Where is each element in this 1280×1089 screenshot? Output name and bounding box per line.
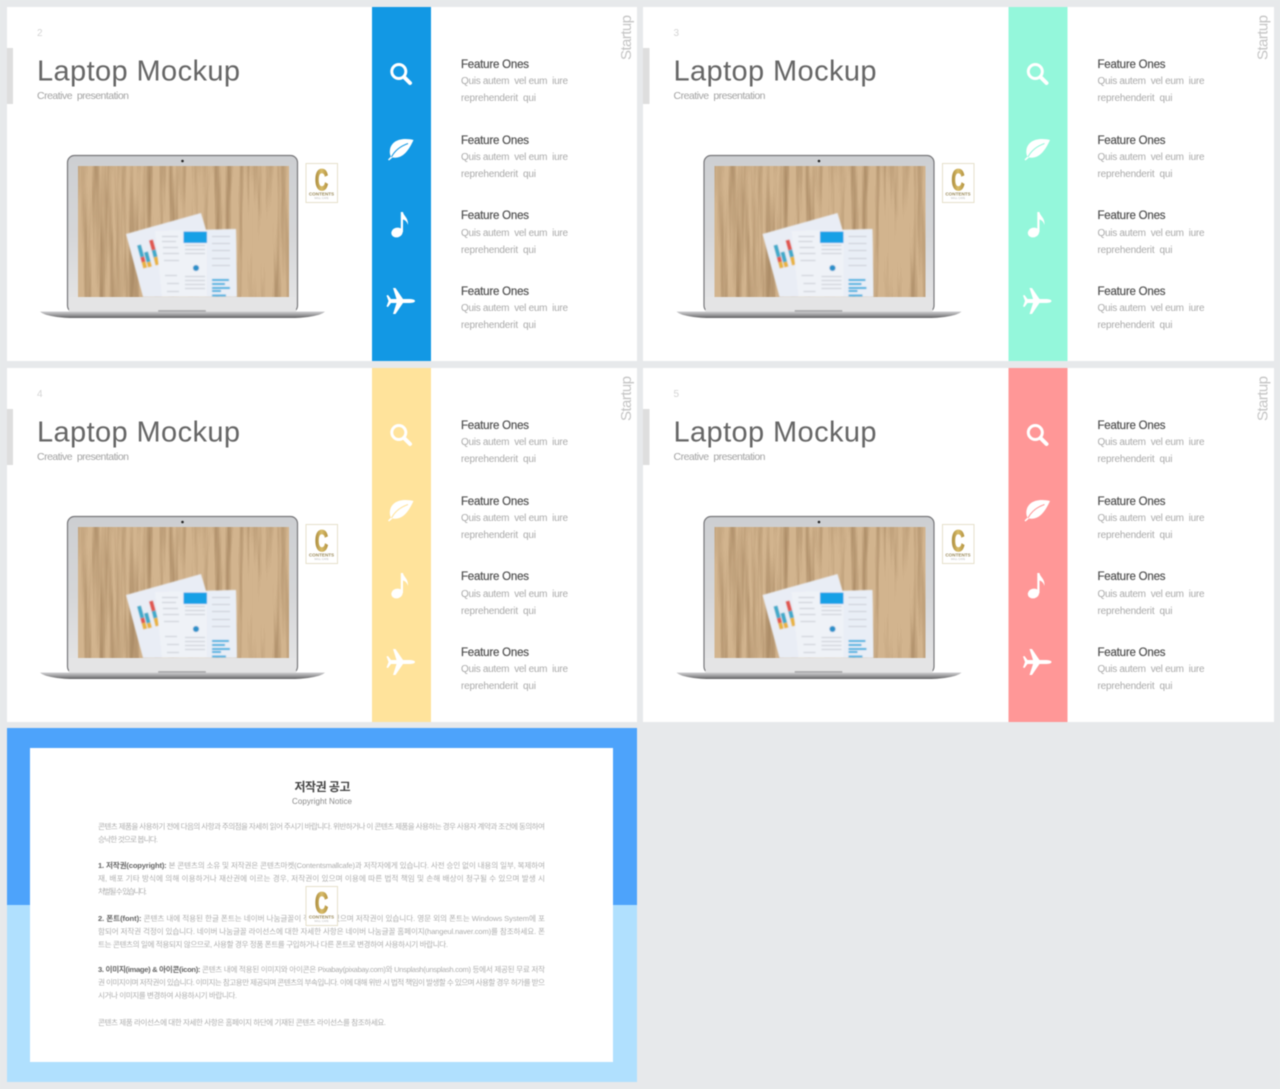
feature 3: reprehenderit qui	[461, 606, 536, 617]
feature 4	[461, 647, 568, 692]
feature 3: Feature Ones	[1098, 571, 1166, 583]
feature 2	[461, 496, 568, 541]
laptop mockup	[40, 516, 325, 679]
feature 4: Quis autem vel eum iure	[1098, 664, 1205, 675]
icon: music note	[390, 212, 408, 239]
copyright heading: 저작권 공고	[294, 779, 350, 794]
feature 1	[461, 59, 568, 104]
feature 4: Feature Ones	[1098, 647, 1166, 659]
feature 3: Feature Ones	[461, 571, 529, 583]
logo watermark: MALL CAFE	[314, 919, 329, 923]
section 2: font: 2. 폰트(font): 콘텐츠 내에 적용된 한글 폰트는 네이버 나눔글꼴이 적용되어 있으며 저작권이 있습니다. 영문 외의 폰트는 Windows System에 포	[98, 913, 545, 923]
feature 1	[461, 420, 568, 465]
icon: search	[1028, 426, 1046, 444]
vertical label: Startup	[1254, 376, 1272, 421]
page number: 5	[674, 389, 680, 400]
feature 3	[1098, 210, 1205, 256]
feature 4: Feature Ones	[461, 647, 529, 659]
logo: MALL CAFE	[951, 557, 965, 561]
feature 3: Quis autem vel eum iure	[1098, 228, 1205, 239]
feature 4: reprehenderit qui	[1098, 681, 1172, 692]
feature 1: reprehenderit qui	[1098, 93, 1172, 104]
feature 4: Quis autem vel eum iure	[461, 303, 568, 314]
icon: leaf	[388, 500, 414, 522]
feature 1: Quis autem vel eum iure	[461, 76, 568, 87]
logo watermark: CONTENTS	[309, 914, 334, 920]
icon: music note	[1027, 212, 1045, 239]
section 3: image and icon	[98, 964, 545, 1000]
laptop mockup	[676, 156, 962, 318]
feature 4: reprehenderit qui	[1098, 320, 1172, 331]
feature 4: Feature Ones	[461, 286, 529, 298]
feature 2: Quis autem vel eum iure	[461, 513, 568, 524]
feature 3	[461, 210, 568, 256]
logo: CONTENTS	[945, 552, 971, 558]
icon: music note	[1027, 573, 1045, 600]
feature 2: Feature Ones	[1098, 496, 1166, 508]
section 3: image and icon: 시거나 이미지를 변경하여 사용하시기 바랍니다.	[98, 990, 237, 1000]
panel: slide 3 mint	[643, 7, 1274, 361]
subtitle: Creative presentation	[37, 451, 129, 463]
logo: CONTENTS	[309, 552, 334, 558]
vertical label: Startup	[1254, 15, 1272, 60]
laptop mockup	[676, 516, 962, 679]
icon: search	[392, 64, 410, 83]
logo: MALL CAFE	[314, 557, 329, 561]
feature 4: Feature Ones	[1098, 286, 1166, 298]
feature 4: reprehenderit qui	[461, 681, 536, 692]
logo: C	[952, 164, 964, 197]
title: Laptop Mockup	[674, 416, 876, 448]
section 3: image and icon: 3. 이미지(image) & 아이콘(icon): 콘텐츠 내에 적용된 이미지와 아이콘은 Pixabay(pixabay.com)와 Unsplash(unsplash.com) 등에서 제공된 무료 저작	[98, 964, 545, 974]
logo watermark	[306, 886, 338, 926]
feature 1: Feature Ones	[461, 59, 529, 71]
feature 4	[461, 286, 568, 331]
feature 3: Feature Ones	[1098, 210, 1166, 222]
panel: slide 2 blue	[7, 7, 637, 361]
intro text: 콘텐츠 제품을 사용하기 전에 다음의 사항과 주의점을 자세히 읽어 주시기 바랍니다. 위반하거나 이 콘텐츠 제품을 사용하는 경우 사용자 계약과 조건에 동의하여	[98, 821, 545, 831]
feature 3: Feature Ones	[461, 210, 529, 222]
feature 1: reprehenderit qui	[461, 93, 536, 104]
feature 2: reprehenderit qui	[1098, 530, 1172, 541]
feature 2: Feature Ones	[1098, 135, 1166, 147]
feature 2	[1098, 496, 1205, 541]
copyright subheading: Copyright Notice	[292, 797, 353, 806]
page number: 2	[37, 28, 43, 39]
section 1: copyright: 1. 저작권(copyright): 본 콘텐츠의 소유 및 저작권은 콘텐츠마켓(Contentsmallcafe)과 저작자에게 있습니다. 사전 승인 없이 내용의 일부, 복제하여	[98, 860, 545, 870]
icon: airplane	[1023, 649, 1052, 675]
feature 2: Feature Ones	[461, 135, 529, 147]
feature 3: reprehenderit qui	[1098, 245, 1172, 256]
feature 3: Quis autem vel eum iure	[1098, 589, 1205, 600]
feature 2: reprehenderit qui	[461, 169, 536, 180]
logo: C	[315, 164, 328, 197]
section 1: copyright: 재, 배포 기타 방식에 의해 이용하거나 재산권에 이르는 경우, 저작권이 있으며 이용에 따른 법적 책임 및 손해 배상이 청구될 수 있으며 발생 시	[98, 873, 545, 883]
feature 1: reprehenderit qui	[1098, 454, 1172, 465]
logo	[942, 164, 974, 202]
feature 1	[1098, 420, 1205, 465]
page number: 3	[674, 28, 680, 39]
icon: music note	[390, 573, 408, 600]
feature 1: Feature Ones	[1098, 59, 1166, 71]
subtitle: Creative presentation	[37, 90, 129, 102]
page number: 4	[37, 389, 43, 400]
icon: leaf	[1024, 139, 1050, 160]
subtitle: Creative presentation	[674, 451, 766, 463]
icon: leaf	[1024, 500, 1050, 522]
icon: leaf	[388, 139, 414, 160]
feature 3: reprehenderit qui	[1098, 606, 1172, 617]
section 1: copyright: 처벌될 수 있습니다.	[98, 886, 147, 896]
feature 3: Quis autem vel eum iure	[461, 228, 568, 239]
section 3: image and icon: 권 이미지이며 저작권이 있습니다. 이미지는 참고용만 제공되며 콘텐츠의 부속입니다. 이에 대해 위반 시 법적 책임이 발생할 수 있으며 사용할 경우 허가를 받으	[98, 977, 545, 987]
icon sidebar	[1008, 368, 1068, 722]
feature 3	[461, 571, 568, 617]
feature 1: Quis autem vel eum iure	[1098, 76, 1205, 87]
logo: C	[315, 525, 328, 558]
icon: airplane	[1023, 288, 1052, 314]
feature 2: Quis autem vel eum iure	[1098, 152, 1205, 163]
icon sidebar	[372, 7, 431, 361]
icon: search	[1028, 64, 1046, 83]
logo	[942, 524, 974, 564]
title: Laptop Mockup	[37, 56, 240, 88]
logo watermark: C	[315, 887, 328, 920]
panel: slide 5 coral	[643, 368, 1274, 722]
logo: CONTENTS	[309, 192, 334, 196]
intro text	[98, 821, 545, 844]
feature 2: reprehenderit qui	[461, 530, 536, 541]
icon: airplane	[386, 288, 415, 314]
panel: slide 4 yellow	[7, 368, 637, 722]
logo: MALL CAFE	[951, 196, 965, 200]
feature 2: reprehenderit qui	[1098, 169, 1172, 180]
feature 1: Feature Ones	[461, 420, 529, 432]
section 2: font: 함되어 저작권 걱정이 있습니다. 네이버 나눔글꼴 라이선스에 대한 자세한 사항은 네이버 나눔글꼴 홈페이지(hangeul.naver.com)를 참조하세요. 폰	[98, 926, 545, 936]
title: Laptop Mockup	[674, 56, 876, 88]
logo: MALL CAFE	[314, 196, 329, 200]
title: Laptop Mockup	[37, 416, 240, 448]
logo	[306, 164, 338, 202]
panel: copyright notice slide	[7, 728, 637, 1082]
feature 3: Quis autem vel eum iure	[461, 589, 568, 600]
intro text: 승낙한 것으로 봅니다.	[98, 834, 158, 844]
feature 4: Quis autem vel eum iure	[1098, 303, 1205, 314]
feature 4: reprehenderit qui	[461, 320, 536, 331]
feature 1: Quis autem vel eum iure	[1098, 437, 1205, 448]
feature 4	[1098, 286, 1205, 331]
icon sidebar	[1008, 7, 1068, 361]
subtitle: Creative presentation	[674, 90, 766, 102]
feature 1: reprehenderit qui	[461, 454, 536, 465]
section 2: font	[98, 913, 545, 949]
feature 3	[1098, 571, 1205, 617]
icon: airplane	[386, 649, 415, 675]
closing note: 콘텐츠 제품 라이선스에 대한 자세한 사항은 홈페이지 하단에 기재된 콘텐츠 라이선스를 참조하세요.	[98, 1017, 386, 1027]
feature 1: Quis autem vel eum iure	[461, 437, 568, 448]
logo: CONTENTS	[945, 192, 971, 196]
section 2: font: 트는 콘텐츠의 일에 적용되지 않으므로, 사용할 경우 정품 폰트를 구입하거나 다른 폰트로 변경하여 사용하시기 바랍니다.	[98, 939, 448, 949]
feature 2: Quis autem vel eum iure	[1098, 513, 1205, 524]
feature 1: Feature Ones	[1098, 420, 1166, 432]
logo	[306, 524, 338, 564]
feature 2: Quis autem vel eum iure	[461, 152, 568, 163]
feature 2	[461, 135, 568, 180]
feature 4	[1098, 647, 1205, 692]
feature 1	[1098, 59, 1205, 104]
icon sidebar	[372, 368, 431, 722]
logo: C	[952, 525, 964, 558]
vertical label: Startup	[618, 15, 635, 60]
section 1: copyright	[98, 860, 545, 896]
feature 2: Feature Ones	[461, 496, 529, 508]
feature 2	[1098, 135, 1205, 180]
feature 3: reprehenderit qui	[461, 245, 536, 256]
icon: search	[392, 426, 410, 444]
vertical label: Startup	[618, 376, 635, 421]
laptop mockup	[40, 156, 325, 318]
feature 4: Quis autem vel eum iure	[461, 664, 568, 675]
